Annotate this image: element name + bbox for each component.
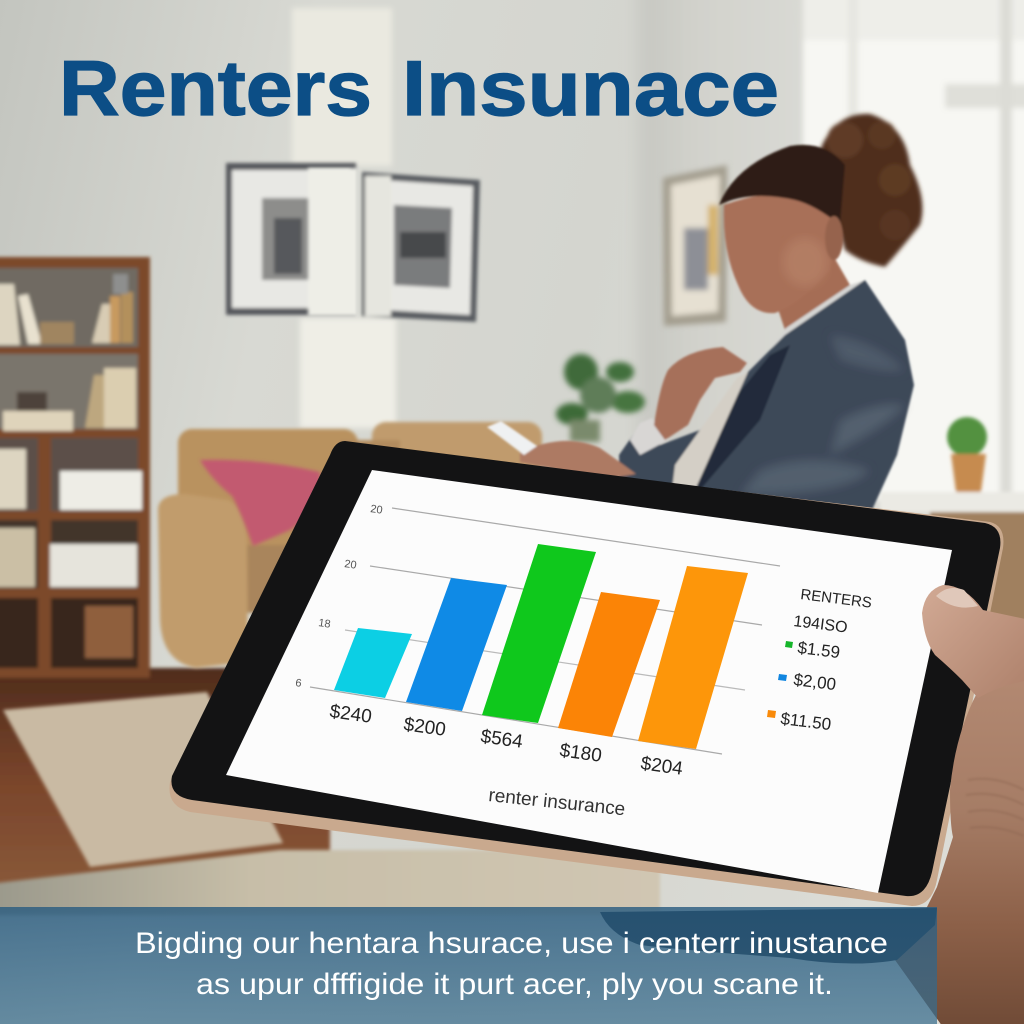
title: Insunace [402, 44, 779, 132]
bar: orange [558, 592, 660, 737]
legend: $11.50 [780, 709, 832, 734]
potted plant on window sill [880, 417, 1024, 622]
caption text: Bigding our hentara hsurace, use i centerr inustance [135, 927, 888, 960]
bar labels: $564 [479, 726, 525, 753]
bar: cyan [334, 628, 412, 698]
sofa [158, 422, 542, 668]
tablet screen [226, 470, 952, 893]
tablet [169, 441, 1003, 906]
hair top [719, 145, 845, 225]
axis labels: 20 [344, 558, 357, 572]
bar: blue [406, 578, 507, 711]
phone [487, 421, 537, 455]
neck [775, 250, 850, 345]
legend: $1.59 [797, 638, 841, 662]
bar: green [482, 544, 596, 723]
legend: RENTERS [800, 586, 873, 612]
bar chart [295, 503, 780, 780]
thumbnail [936, 588, 978, 608]
raised hand [654, 347, 747, 440]
palm [895, 660, 1024, 1024]
white cuff [630, 418, 668, 455]
bar: amber [638, 566, 748, 749]
ear [825, 216, 843, 260]
legend [767, 586, 873, 734]
tablet body [171, 441, 1000, 896]
hand holding tablet [895, 585, 1024, 1024]
caption text: as upur dfffigide it purt acer, ply you scane it. [196, 968, 833, 1001]
right wall [638, 0, 880, 500]
tablet portion under banner [600, 908, 937, 964]
jacket highlights [740, 335, 905, 495]
framed picture left [226, 163, 356, 315]
thumb [922, 585, 1024, 698]
framed picture middle [308, 168, 480, 322]
woman [487, 114, 922, 510]
bookshelf [0, 257, 150, 678]
caption banner [0, 907, 937, 1024]
title [59, 44, 779, 132]
face [724, 195, 840, 313]
jacket dark lapel [680, 345, 790, 490]
rug [3, 692, 283, 867]
tablet edge [169, 443, 1003, 906]
bar labels: $180 [558, 740, 603, 767]
collar [770, 280, 865, 360]
bar labels [328, 701, 685, 780]
plant on wall side [556, 354, 645, 442]
table top [0, 850, 660, 915]
sun patches on wall [292, 8, 396, 428]
bar labels: $240 [328, 701, 373, 728]
axis labels [295, 503, 383, 690]
lower hand [520, 441, 636, 480]
palm creases [966, 779, 1024, 836]
framed picture right [663, 165, 727, 326]
legend: $2,00 [793, 670, 837, 694]
axis labels: 6 [295, 677, 302, 690]
axis labels: 18 [318, 617, 331, 631]
axis labels: 20 [370, 503, 383, 517]
bar labels: $200 [402, 714, 447, 741]
shirt panel [672, 372, 748, 490]
caption text [135, 927, 888, 1001]
bar labels: $204 [639, 753, 685, 780]
grid lines [310, 508, 780, 754]
title: Renters [59, 44, 372, 132]
chart caption: renter insurance [487, 785, 626, 820]
window light [803, 0, 1024, 500]
cushion [200, 460, 320, 546]
floor [0, 668, 330, 898]
jacket [619, 280, 914, 510]
legend: 194ISO [793, 613, 848, 637]
ponytail [820, 114, 922, 267]
